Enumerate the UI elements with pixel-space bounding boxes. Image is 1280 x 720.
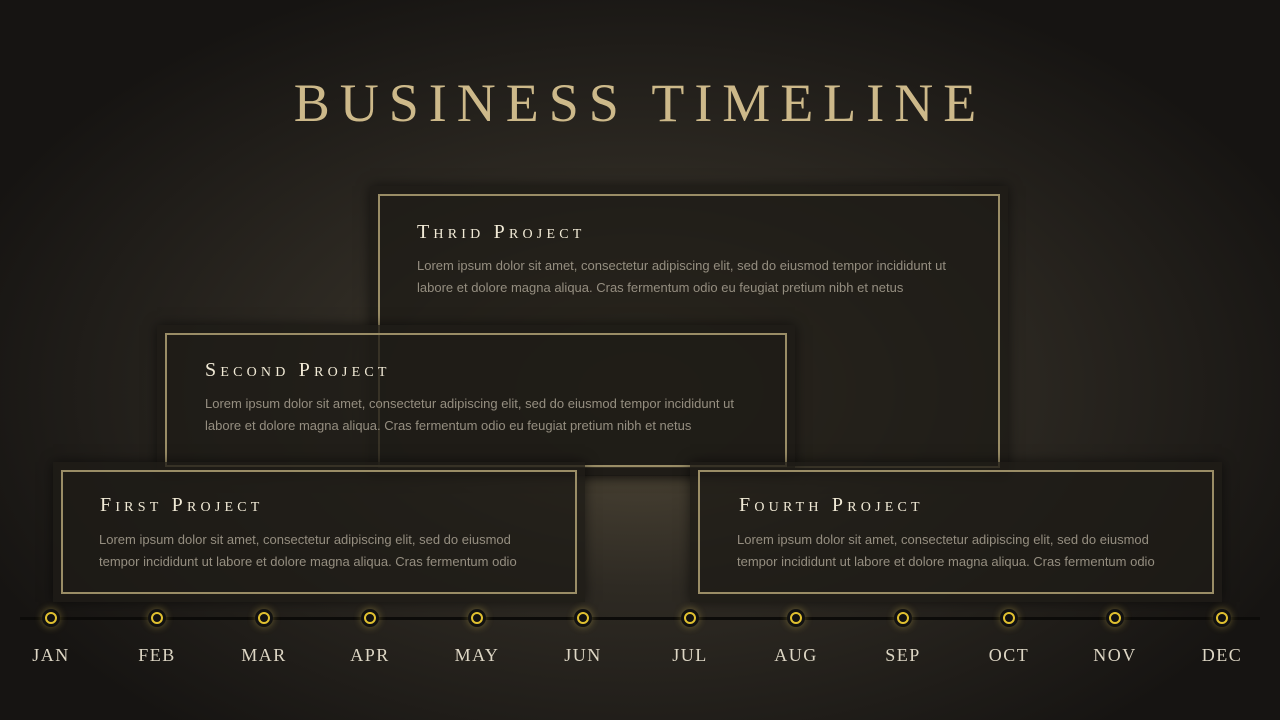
month labels: JUL [672,645,708,665]
text: first [99,532,517,569]
heading: fourth: Fourth Project [739,494,924,516]
month labels: JUN [564,645,602,665]
month labels: MAR [241,645,287,665]
heading: first: First Project [100,494,264,516]
text: fourth: Lorem ipsum dolor sit amet, consectetur adipiscing elit, sed do eiusmod [737,532,1149,547]
timeline [20,617,1260,620]
title: BUSINESS TIMELINE [294,73,986,133]
text: third: labore et dolore magna aliqua. Cras fermentum odio eu feugiat pretium nibh et netus [417,280,903,295]
text: first: Lorem ipsum dolor sit amet, consectetur adipiscing elit, sed do eiusmod [99,532,511,547]
panel: third project [370,186,1008,476]
heading: second: Second Project [205,359,391,381]
text: second [205,396,734,433]
panel: first project [53,462,585,602]
month labels: FEB [138,645,176,665]
panel: second project [157,325,795,475]
text: second: labore et dolore magna aliqua. Cras fermentum odio eu feugiat pretium nibh et netus [205,418,691,433]
text: fourth: tempor incididunt ut labore et dolore magna aliqua. Cras fermentum odio [737,554,1155,569]
month labels: APR [350,645,390,665]
month labels: JAN [32,645,70,665]
text: third [417,258,946,295]
month labels: MAY [455,645,499,665]
panel: fourth project [690,462,1222,602]
text: third: Lorem ipsum dolor sit amet, consectetur adipiscing elit, sed do eiusmod tempor incididunt ut [417,258,946,273]
month labels: AUG [774,645,818,665]
text: fourth [737,532,1155,569]
month labels: OCT [989,645,1029,665]
month labels: NOV [1093,645,1137,665]
month labels: SEP [885,645,921,665]
text: second: Lorem ipsum dolor sit amet, consectetur adipiscing elit, sed do eiusmod tempor incididunt ut [205,396,734,411]
heading: third: Thrid Project [417,221,586,243]
text: first: tempor incididunt ut labore et dolore magna aliqua. Cras fermentum odio [99,554,517,569]
month labels: DEC [1202,645,1242,665]
